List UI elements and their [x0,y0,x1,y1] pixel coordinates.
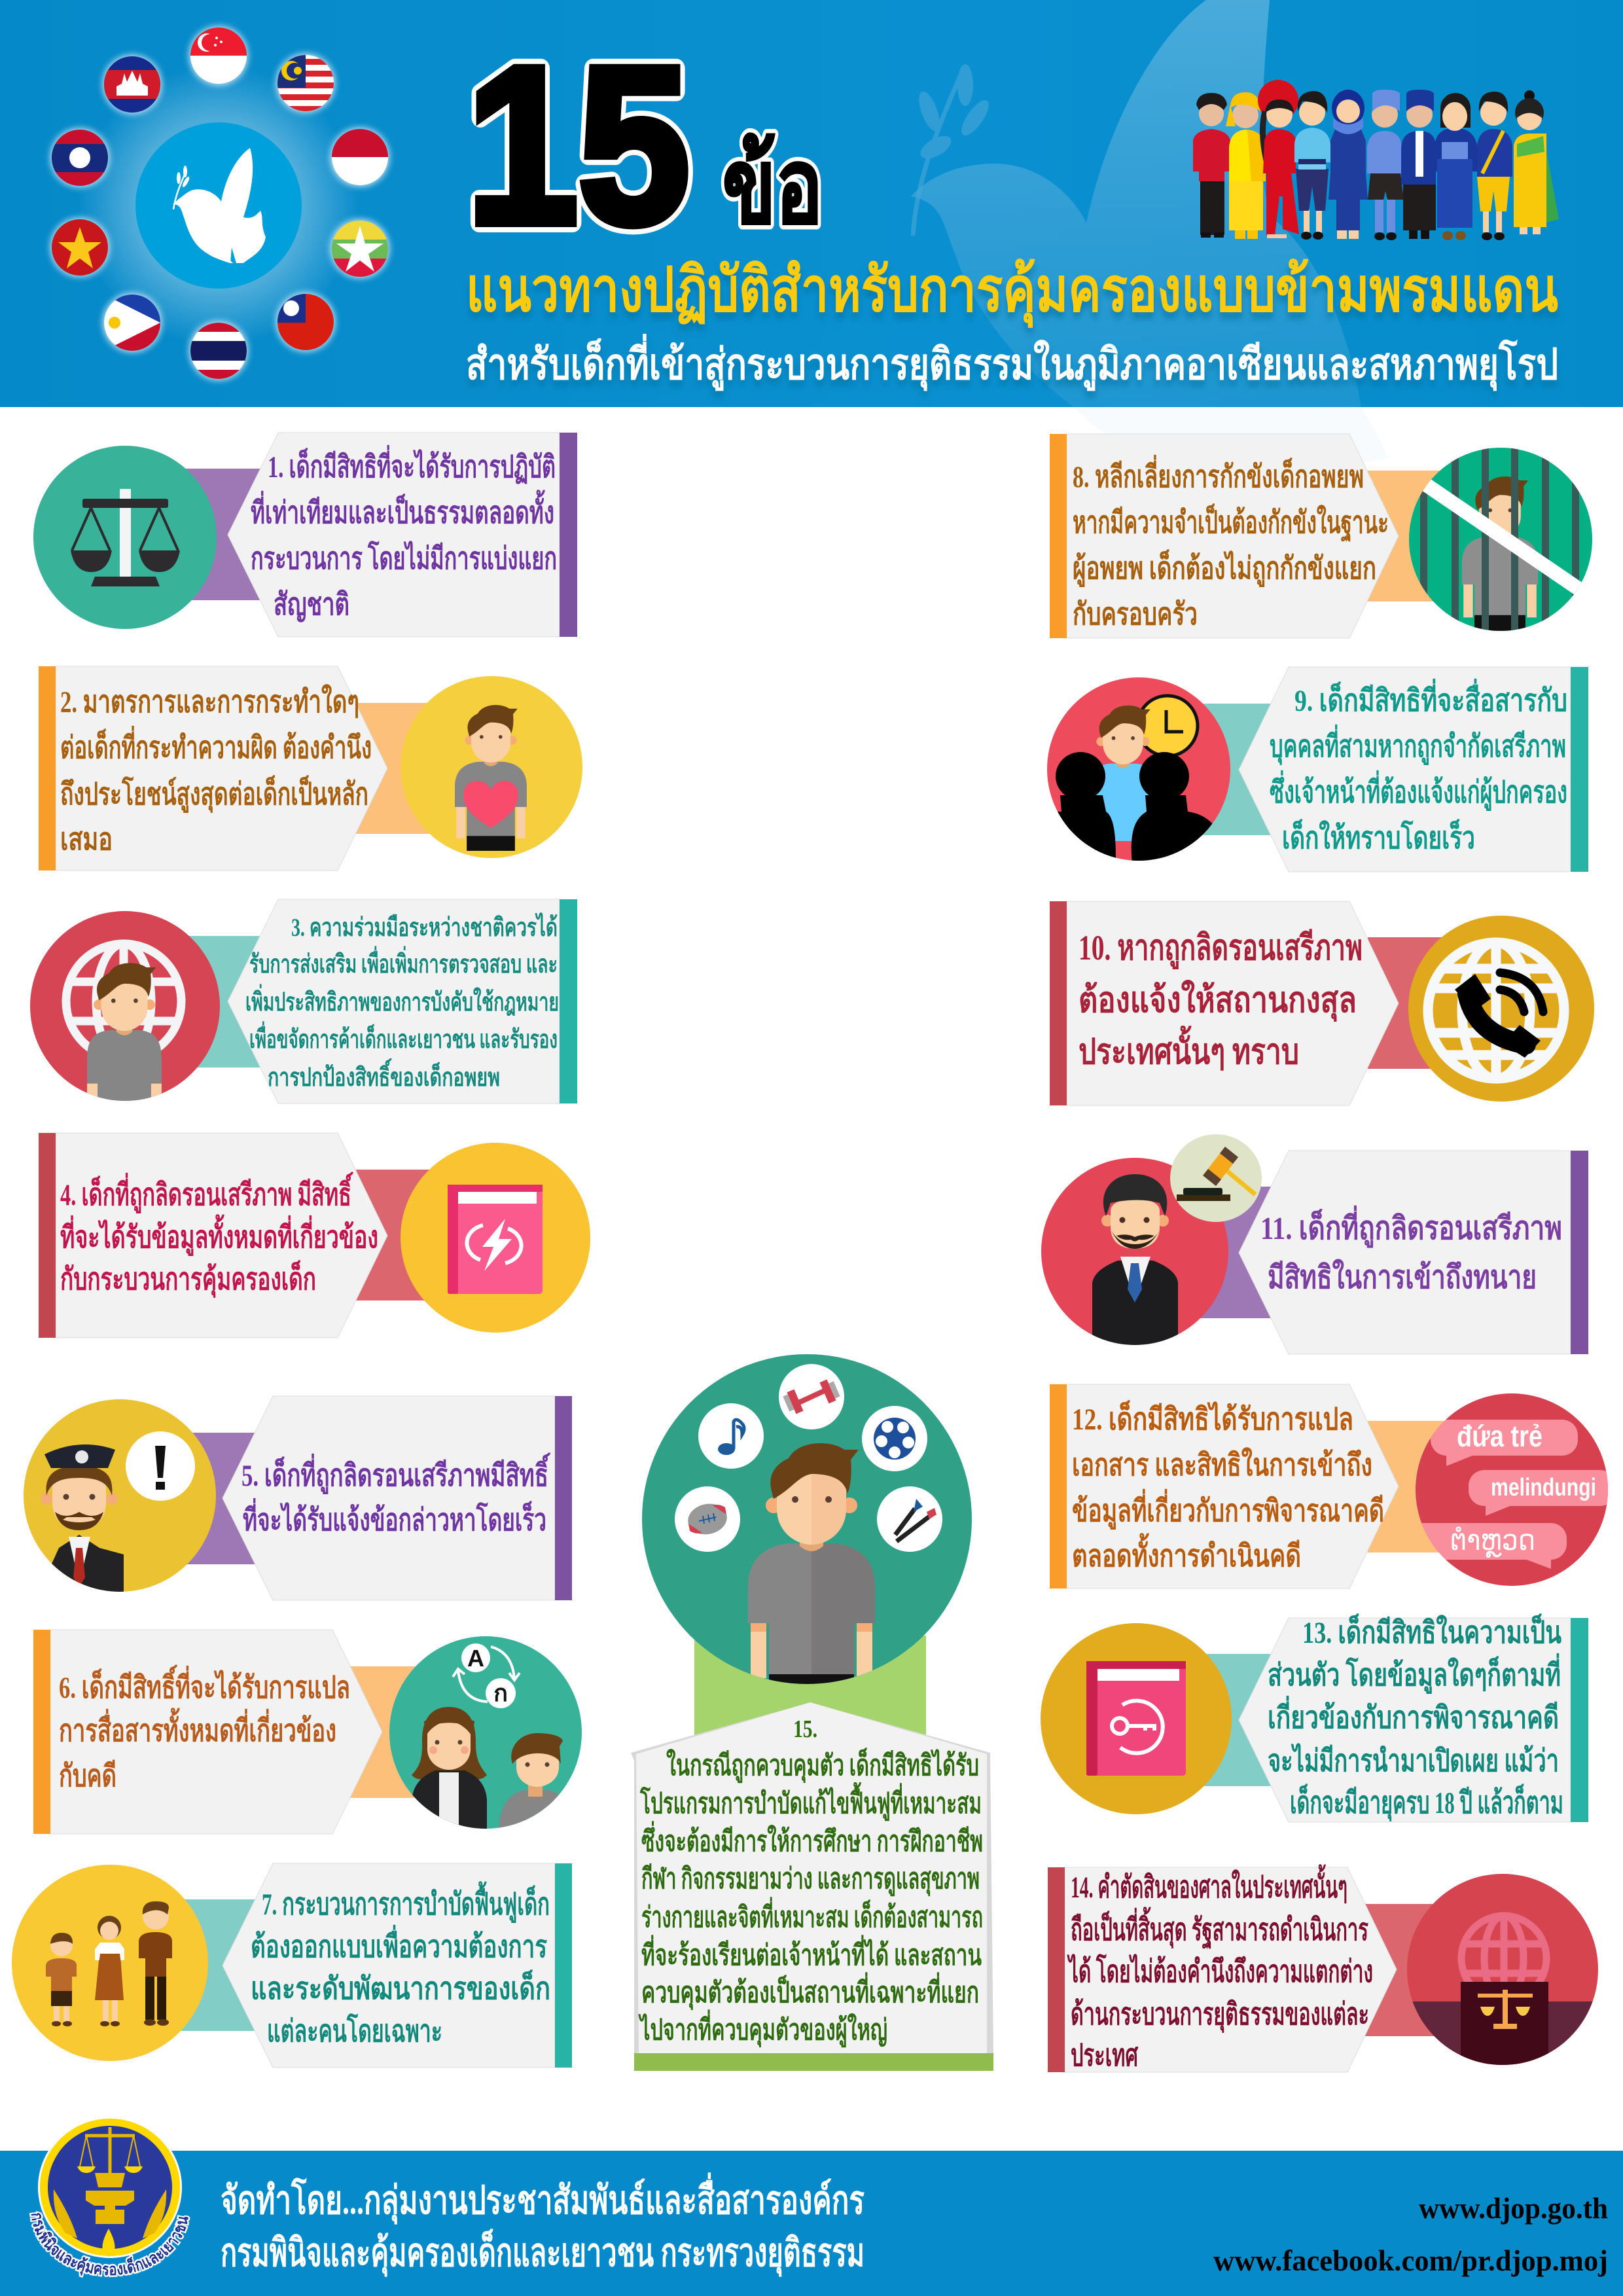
text: item 10: 10. หากถูกลิดรอนเสรีภาพ [1079,928,1363,969]
flag: Indonesia [332,129,388,185]
icon: paint brushes [877,1486,942,1552]
text: item 3: เพิ่มประสิทธิภาพของการบังคับใช้กฎหมาย [245,984,559,1016]
text: item 10 [1079,928,1363,1071]
icon: pink book with bolt [401,1143,590,1333]
panel: item 9 [1041,667,1588,872]
organiser text: จัดทำโดย...กลุ่มงานประชาสัมพันธ์และสื่อสารองค์กร [221,2172,865,2225]
person 2 [1226,92,1266,239]
big number 15: 15 [467,20,690,270]
text: item 1: 1. เด็กมีสิทธิที่จะได้รับการปฏิบัติ [268,444,556,484]
icon: scales of justice [33,446,217,629]
icon: child with guardians and clock [1041,677,1230,864]
text: item 12: ข้อมูลที่เกี่ยวกับการพิจารณาคดี [1072,1488,1384,1530]
logo ring text: กรมพินิจและคุ้มครองเด็กและเยาวชน [29,2211,190,2278]
text: item 4: 4. เด็กที่ถูกลิดรอนเสรีภาพ มีสิทธิ์ [60,1172,353,1214]
text: item 7 [251,1881,550,2049]
text: item 3: 3. ความร่วมมือระหว่างชาติควรได้ [291,912,558,942]
icon: translation speech bubbles: ຕຳຫຼວດ [1450,1524,1535,1558]
text: item 3: การปกป้องสิทธิ์ของเด็กอพยพ [268,1058,500,1092]
text: item 15: ที่จะร้องเรียนต่อเจ้าหน้าที่ได้ และสถาน [641,1935,982,1971]
website links: www.djop.go.th [1419,2191,1608,2225]
icon: interpreter and child: ก [493,1679,508,1706]
text: item 4: ที่จะได้รับข้อมูลทั้งหมดที่เกี่ยวข้อง [60,1214,378,1257]
panel: item 3 [30,899,577,1121]
footer band [0,2151,1623,2296]
text: item 10: ประเทศนั้นๆ ทราบ [1079,1026,1299,1071]
text: item 15: 15. [793,1715,817,1743]
text: item 7: 7. กระบวนการการบำบัดฟื้นฟูเด็ก [262,1881,550,1924]
text: item 8: 8. หลีกเลี่ยงการกักขังเด็กอพยพ [1073,454,1364,494]
text: item 1: สัญชาติ [274,588,349,622]
icon: globe and person [30,911,220,1121]
icon: globe and court scales [1400,1874,1610,2073]
text: item 12 [1072,1399,1384,1573]
flag: Philippines [104,295,160,351]
text: item 5: 5. เด็กที่ถูกลิดรอนเสรีภาพมีสิทธิ์ [241,1452,550,1495]
text: item 14: ได้ โดยไม่ต้องคำนึงถึงความแตกต่าง [1067,1953,1373,1989]
panel: item 10 [1050,901,1594,1105]
text: item 14: 14. คำตัดสินของศาลในประเทศนั้นๆ [1071,1864,1347,1905]
text: item 8: หากมีความจำเป็นต้องกักขังในฐานะ [1073,503,1389,543]
icon: translation speech bubbles: melindungi [1491,1474,1596,1501]
text: item 12: 12. เด็กมีสิทธิได้รับการแปล [1072,1399,1353,1437]
flag: Cambodia [104,56,160,113]
big number 15: 15 [467,20,690,270]
flag: Singapore [190,27,247,84]
text: item 11: 11. เด็กที่ถูกลิดรอนเสรีภาพ [1260,1205,1562,1248]
panel: item 8 [1050,434,1592,638]
panel: item 1 [33,433,577,637]
organiser text: กรมพินิจและคุ้มครองเด็กและเยาวชน กระทรวงยุติธรรม [221,2229,865,2277]
text: item 6 [59,1664,350,1793]
text: item 8 [1073,454,1389,632]
word: kho: ข้อ [722,128,823,245]
text: item 5: ที่จะได้รับแจ้งข้อกล่าวหาโดยเร็ว [243,1498,546,1537]
icon: lawyer [1041,1134,1262,1348]
text: item 2 [60,683,372,857]
website links [1213,2191,1608,2277]
text: item 9: เด็กให้ทราบโดยเร็ว [1282,818,1475,855]
flag: Laos [52,130,108,186]
header banner [0,0,1623,407]
flag: Myanmar [332,221,388,278]
background dove [911,0,1361,407]
panel: item 11 [1041,1134,1588,1354]
icon: translation speech bubbles: đứa trẻ [1457,1419,1543,1453]
text: item 12: ตลอดทั้งการดำเนินคดี [1072,1533,1301,1573]
text: item 11: มีสิทธิในการเข้าถึงทนาย [1268,1259,1537,1295]
icon: dumbbell [779,1364,844,1429]
person 5 [1329,90,1368,239]
text: item 12: เอกสาร และสิทธิในการเข้าถึง [1072,1446,1372,1482]
text: item 6: กับคดี [59,1759,116,1793]
text: item 10: ต้องแจ้งให้สถานกงสุล [1079,979,1357,1022]
panel: item 4 [39,1133,590,1338]
text: item 14: ถือเป็นที่สิ้นสุด รัฐสามารถดำเนินการ [1071,1907,1368,1950]
ASEAN people in national costume [1193,80,1559,240]
text: item 15: ร่างกายและจิตที่เหมาะสม เด็กต้องสามารถ [641,1897,983,1933]
text: item 7: และระดับพัฒนาการของเด็ก [251,1969,550,2006]
icon: three children [12,1865,208,2061]
icon: book with key [1041,1623,1232,1814]
person 7 [1401,90,1436,239]
icon: white dove [173,148,266,263]
panel: item 5 [24,1396,572,1600]
icon: music note [698,1403,764,1469]
text: item 15: ควบคุมตัวต้องเป็นสถานที่เฉพาะที่แยก [641,1972,979,2011]
person 6 [1367,90,1404,240]
flag: Malaysia [277,55,334,112]
icon: translation speech bubbles [1407,1393,1616,1586]
flag ring glow [78,65,359,346]
text: item 2: ถึงประโยชน์สูงสุดต่อเด็กเป็นหลัก [60,774,368,814]
text: item 8: ผู้อพยพ เด็กต้องไม่ถูกกักขังแยก [1073,548,1376,588]
faded dove watermark on white [1073,407,1387,484]
website links: www.facebook.com/pr.djop.moj [1213,2244,1608,2277]
text: item 15: ซึ่งจะต้องมีการให้การศึกษา การฝึกอาชีพ [641,1821,983,1857]
icon: interpreter and child: A [467,1645,484,1672]
text: item 13 [1268,1613,1563,1821]
person 1 [1193,93,1230,238]
text: item 15: กีฬา กิจกรรมยามว่าง และการดูแลสุขภาพ [641,1863,980,1897]
flag: Taiwan [277,294,334,350]
person 8 [1435,93,1477,240]
dove emblem circle [135,122,302,289]
text: item 14: ประเทศ [1071,2039,1139,2073]
text: item 4: กับกระบวนการคุ้มครองเด็ก [60,1259,316,1298]
icon: globe and telephone [1408,916,1594,1102]
panel: item 14 [1048,1864,1610,2073]
text: item 9 [1270,678,1567,855]
organiser text [221,2172,865,2277]
text: item 2: ต่อเด็กที่กระทำความผิด ต้องคำนึง [60,725,372,765]
person 9 [1477,92,1512,240]
icon: interpreter and child [389,1636,582,1833]
text: item 11 [1260,1205,1562,1295]
person 4 [1294,91,1330,240]
icon: police officer with exclamation [24,1399,216,1597]
text: item 6: 6. เด็กมีสิทธิ์ที่จะได้รับการแปล [59,1664,350,1705]
text: item 1: ที่เท่าเทียมและเป็นธรรมตลอดทั้ง [251,490,554,530]
text: item 15: ในกรณีถูกควบคุมตัว เด็กมีสิทธิได้รับ [666,1748,979,1784]
icon: child with heart [401,676,582,858]
text: item 7: ต้องออกแบบเพื่อความต้องการ [251,1924,547,1964]
text: item 2: 2. มาตรการและการกระทำใดๆ [60,683,359,719]
text: item 7: แต่ละคนโดยเฉพาะ [267,2013,442,2049]
flag: Thailand [190,323,247,379]
text: item 15: โปรแกรมการบำบัดแก้ไขฟื้นฟูที่เหมาะสม [639,1782,982,1821]
panel: item 13 [1041,1613,1588,1822]
text: item 3: รับการส่งเสริม เพื่อเพิ่มการตรวจสอบ และ [249,946,558,978]
text: item 3 [245,912,559,1092]
person 10 [1514,90,1559,234]
panel: item 12 [1050,1384,1616,1588]
text: item 8: กับครอบครัว [1073,598,1198,632]
icon: gavel [1170,1134,1262,1222]
panel: item 7 [12,1863,572,2068]
panel: item 2 [39,666,582,870]
text: item 15: ไปจากที่ควบคุมตัวของผู้ใหญ่ [638,2009,887,2048]
text: item 1: กระบวนการ โดยไม่มีการแบ่งแยก [251,540,557,576]
text: item 15 [638,1715,983,2048]
panel: item 6 [33,1630,582,1834]
text: item 3: เพื่อขจัดการค้าเด็กและเยาวชน และรับรอง [249,1021,558,1054]
person 3 [1258,80,1299,238]
icon: soccer ball [862,1406,927,1471]
text: item 5 [241,1452,550,1537]
flag: Vietnam [52,219,108,276]
text: item 1 [251,444,557,622]
department logo [29,2119,190,2278]
icon: child with activities [642,1354,972,1687]
text: item 6: การสื่อสารทั้งหมดที่เกี่ยวข้อง [59,1708,336,1748]
flag halos [50,26,389,380]
text: item 14: ด้านกระบวนการยุติธรรมของแต่ละ [1071,1998,1369,2033]
icon: child behind bars [1409,445,1592,635]
word: kho: ข้อ [722,128,823,245]
text: item 14 [1067,1864,1373,2073]
text: item 4 [60,1172,378,1298]
panel: item 15 [631,1354,993,2071]
text: item 2: เสมอ [60,823,113,857]
icon: rugby ball [675,1486,740,1552]
